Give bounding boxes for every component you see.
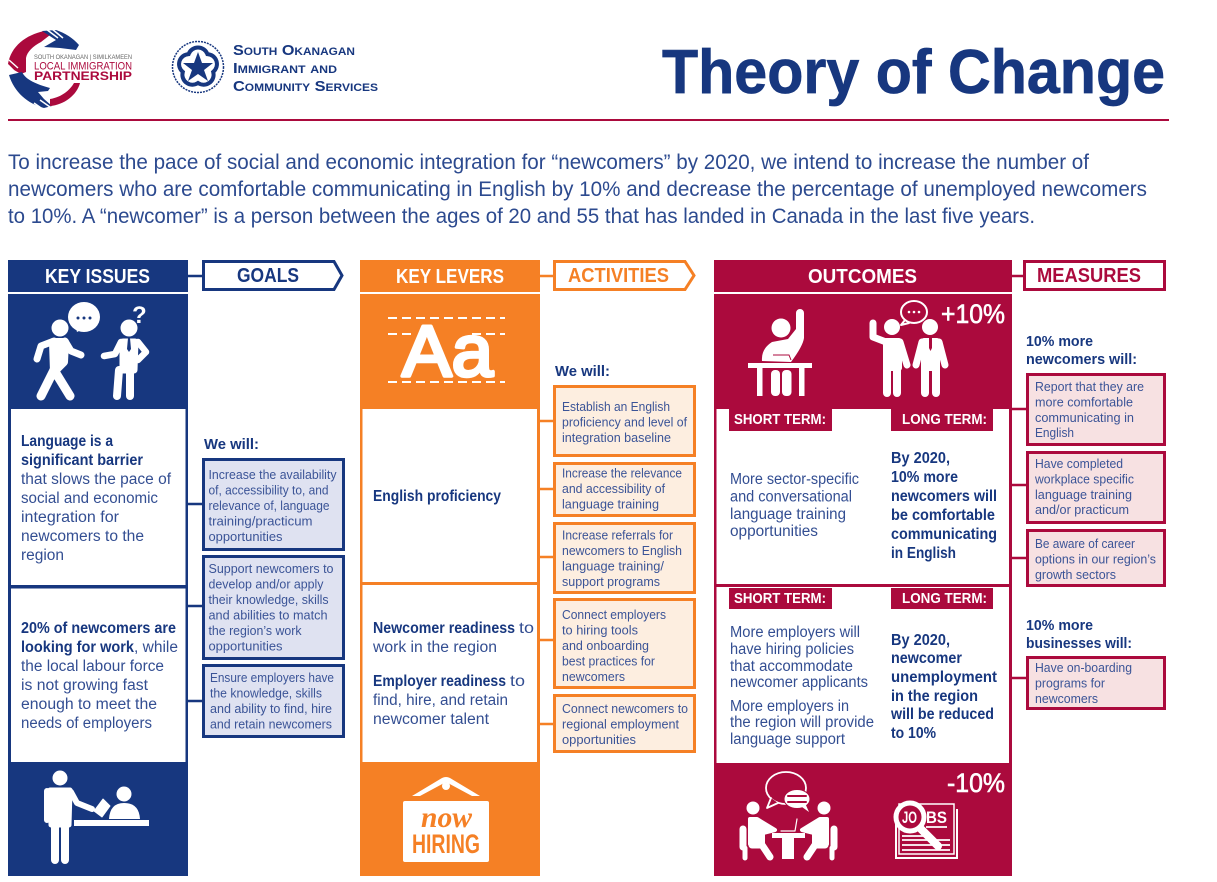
activity box 3: Increase referrals for (562, 528, 673, 542)
stat: minus ten percent: -10% (947, 768, 1005, 798)
organisation name: South Okanagan (233, 42, 355, 59)
icon: two people talking (37, 302, 146, 396)
activity box 1 (554, 386, 694, 456)
tag: long term: LONG TERM: (902, 590, 987, 607)
measure box 1: English (1035, 426, 1074, 440)
activity box 5: opportunities (562, 733, 636, 747)
connector: issues to goals (188, 276, 203, 701)
tag: short term: SHORT TERM: (734, 411, 826, 428)
icon: now hiring sign: now (421, 801, 473, 834)
activity box 1: proficiency and level of (562, 416, 688, 430)
intro text: to 10%. A “newcomer” is a person between the ages of 20 and 55 that has landed in Canada in the last five years. (8, 205, 1035, 228)
text box: communication outcomes (716, 409, 1009, 584)
measure box 2: workplace specific (1034, 472, 1134, 486)
goal box 1 (204, 460, 344, 550)
icon: question mark: ? (132, 302, 147, 329)
text box: looking for work: is not growing fast (21, 677, 149, 694)
measure box 3: Be aware of career (1035, 537, 1135, 551)
activity box 3: newcomers to English (562, 544, 682, 558)
text box: looking for work: looking for work (21, 639, 134, 656)
panel: outcomes (714, 260, 1012, 876)
heading: measures: MEASURES (1037, 265, 1141, 287)
text box: language barrier: newcomers to the (21, 528, 144, 545)
text box: employment outcomes (716, 587, 1009, 763)
text box: looking for work: , while (134, 639, 178, 656)
activity box 4: newcomers (562, 670, 625, 684)
text box: employment outcomes: newcomer (891, 650, 962, 667)
heading: goals (204, 262, 342, 290)
text box: readiness: to (510, 673, 525, 690)
heading: activities: ACTIVITIES (568, 265, 669, 287)
text box: looking for work: enough to meet the (21, 696, 157, 713)
goal box 2: and abilities to match (208, 608, 328, 622)
text box: communication outcomes: By 2020, (891, 450, 950, 467)
goal box 3: and ability to find, hire (210, 702, 332, 716)
goal box 1: opportunities (208, 530, 282, 544)
goal box 2: their knowledge, skills (208, 593, 328, 607)
text box: employment outcomes: to 10% (891, 725, 936, 742)
intro text (8, 151, 1147, 228)
measure box 4 (1028, 658, 1164, 708)
heading: activities (554, 262, 694, 290)
icon: now hiring sign (403, 777, 489, 862)
text box: employment outcomes: More employers in (730, 698, 849, 715)
activity box 5: Connect newcomers to (562, 702, 688, 716)
text box: english proficiency: English proficiency (373, 488, 501, 505)
activity box 2: language training (562, 498, 659, 512)
text box: language barrier: that slows the pace of (21, 471, 172, 488)
icon: two people conversing (873, 301, 945, 393)
text box: employment outcomes: language support (730, 731, 846, 748)
organisation name: Immigrant and (233, 60, 337, 77)
icon: jobs newspaper and magnifier: BS (926, 808, 947, 827)
panel: key issues (8, 260, 188, 876)
goal box 3: and retain newcomers (210, 718, 332, 732)
text box: employment outcomes: in the region (891, 688, 978, 705)
intro text: To increase the pace of social and economic integration for “newcomers” by 2020, we intend to increase the number of (8, 151, 1089, 174)
measure box 3: growth sectors (1035, 568, 1116, 582)
text box: employment outcomes: By 2020, (891, 632, 950, 649)
logo: local immigration partnership: LOCAL IMMIGRATION (34, 60, 132, 72)
activity box 2: Increase the relevance (562, 466, 682, 480)
measure box 1: more comfortable (1035, 396, 1133, 410)
measure box 4: Have on-boarding (1035, 661, 1132, 675)
tag: long term (891, 409, 993, 431)
connector: outcomes to measures (1009, 276, 1026, 678)
title: Theory of Change (662, 38, 1165, 107)
tag: short term: SHORT TERM: (734, 590, 826, 607)
activity box 4: best practices for (562, 654, 655, 668)
logo: local immigration partnership: PARTNERSHIP (34, 69, 132, 83)
goal box 2: the region’s work (208, 624, 302, 638)
logo: local immigration partnership (8, 29, 132, 110)
text box: readiness: find, hire, and retain (373, 692, 508, 709)
goal box 2: opportunities (208, 640, 282, 654)
text box: looking for work (11, 588, 186, 762)
measure box 4: newcomers (1035, 692, 1098, 706)
goal box 3: Ensure employers have (210, 671, 334, 685)
activity box 2: and accessibility of (562, 482, 666, 496)
text box: communication outcomes: be comfortable (891, 507, 995, 524)
text box: employment outcomes: the region will provide (730, 714, 874, 731)
goal box 1: training/practicum (208, 514, 312, 528)
heading: goals: GOALS (237, 265, 299, 287)
text: businesses will: businesses will: (1026, 635, 1132, 652)
activity box 4: Connect employers (562, 608, 666, 622)
text box: employment outcomes: unemployment (891, 669, 997, 686)
text box: readiness: to (519, 620, 534, 637)
goal box 1: relevance of, language (208, 499, 330, 513)
text box: readiness (362, 585, 537, 762)
text box: looking for work: 20% of newcomers are (21, 620, 176, 637)
measure box 1: Report that they are (1035, 380, 1144, 394)
text: newcomers will: 10% more (1026, 333, 1093, 350)
activity box 1: integration baseline (562, 431, 671, 445)
goal box 3 (204, 666, 344, 736)
text box: communication outcomes: opportunities (730, 523, 818, 540)
text box: employment outcomes: More employers will (730, 624, 860, 641)
logo: local immigration partnership: SOUTH OKANAGAN | SIMILKAMEEN (34, 54, 132, 61)
goal box 3: the knowledge, skills (210, 686, 322, 700)
stat: plus ten percent: +10% (941, 299, 1005, 329)
goal box 1: of, accessibility to, and (208, 484, 329, 498)
goal box 2: Support newcomers to (208, 562, 334, 576)
goal box 2 (204, 556, 344, 658)
text box: communication outcomes: communicating (891, 526, 997, 543)
text box: employment outcomes: that accommodate (730, 658, 853, 675)
activity box 5: regional employment (562, 718, 680, 732)
activity box 4: to hiring tools (562, 624, 638, 638)
text box: looking for work: the local labour force (21, 658, 164, 675)
activity box 2 (554, 464, 694, 516)
heading: key levers: KEY LEVERS (396, 266, 504, 288)
measure box 1: communicating in (1035, 411, 1134, 425)
text box: language barrier: social and economic (21, 490, 158, 507)
text box: readiness: work in the region (372, 639, 497, 656)
text box: communication outcomes: and conversational (730, 488, 852, 506)
icon: now hiring sign: HIRING (412, 829, 480, 859)
text box: language barrier (11, 409, 186, 585)
text box: language barrier: Language is a (21, 433, 113, 450)
text box: english proficiency (362, 409, 537, 582)
logo: immigrant services emblem (172, 42, 224, 92)
heading: key issues: KEY ISSUES (45, 266, 150, 288)
measure box 2: and/or practicum (1035, 503, 1129, 517)
text box: language barrier: integration for (21, 509, 119, 526)
text box: communication outcomes: More sector-specific (730, 471, 859, 488)
measure box 2: language training (1035, 488, 1132, 502)
goal box 2: develop and/or apply (208, 578, 324, 592)
panel: key levers (360, 260, 540, 876)
activity box 4: and onboarding (562, 639, 649, 653)
text box: readiness: newcomer talent (373, 711, 490, 728)
text: goals we will: We will: (204, 436, 259, 453)
text box: communication outcomes: newcomers will (891, 488, 997, 505)
heading: outcomes: OUTCOMES (808, 266, 917, 288)
text box: communication outcomes: language training (730, 506, 846, 523)
icon: letters on ruled lines: Aa (402, 312, 494, 392)
measure box 1 (1028, 374, 1164, 444)
icon: student raising hand (748, 309, 812, 396)
icon: two people meeting at table (743, 772, 834, 859)
icon: jobs newspaper and magnifier (896, 803, 957, 858)
organisation name (233, 42, 378, 95)
intro text: newcomers who are comfortable communicating in English by 10% and decrease the percentage of unemployed newcomers (8, 178, 1147, 201)
text box: employment outcomes: newcomer applicants (730, 674, 868, 691)
measure box 4: programs for (1035, 676, 1105, 690)
icon: person at service desk (47, 770, 149, 860)
text box: language barrier: significant barrier (21, 452, 143, 469)
text box: readiness: Employer readiness (373, 673, 506, 690)
goal box 1: Increase the availability (208, 468, 337, 482)
text box: looking for work: needs of employers (21, 715, 152, 732)
text box: employment outcomes: will be reduced (890, 706, 994, 723)
icon: jobs newspaper and magnifier: JO (902, 808, 917, 827)
activity box 1: Establish an English (562, 400, 670, 414)
text: businesses will: 10% more (1026, 617, 1093, 634)
activity box 3 (554, 524, 694, 592)
measure box 3 (1028, 530, 1164, 586)
activity box 3: language training/ (562, 560, 665, 574)
activity box 4 (554, 600, 694, 688)
measure box 2 (1028, 452, 1164, 522)
text box: communication outcomes: 10% more (891, 469, 958, 486)
measure box 2: Have completed (1035, 457, 1123, 471)
organisation name: Community Services (233, 78, 378, 95)
text: businesses will (1026, 617, 1132, 652)
text box: employment outcomes: have hiring policies (730, 641, 854, 658)
text: newcomers will (1026, 333, 1137, 368)
heading: measures (1024, 262, 1164, 290)
tag: long term: LONG TERM: (902, 411, 987, 428)
activity box 3: support programs (562, 575, 660, 589)
text: activities we will: We will: (555, 363, 610, 380)
connector: levers to activities (537, 276, 554, 724)
text box: communication outcomes: in English (891, 545, 956, 562)
text: newcomers will: newcomers will: (1026, 351, 1137, 368)
text box: readiness: Newcomer readiness (373, 620, 515, 637)
measure box 3: options in our region’s (1035, 552, 1156, 566)
text box: language barrier: region (21, 547, 64, 564)
activity box 5 (554, 696, 694, 752)
